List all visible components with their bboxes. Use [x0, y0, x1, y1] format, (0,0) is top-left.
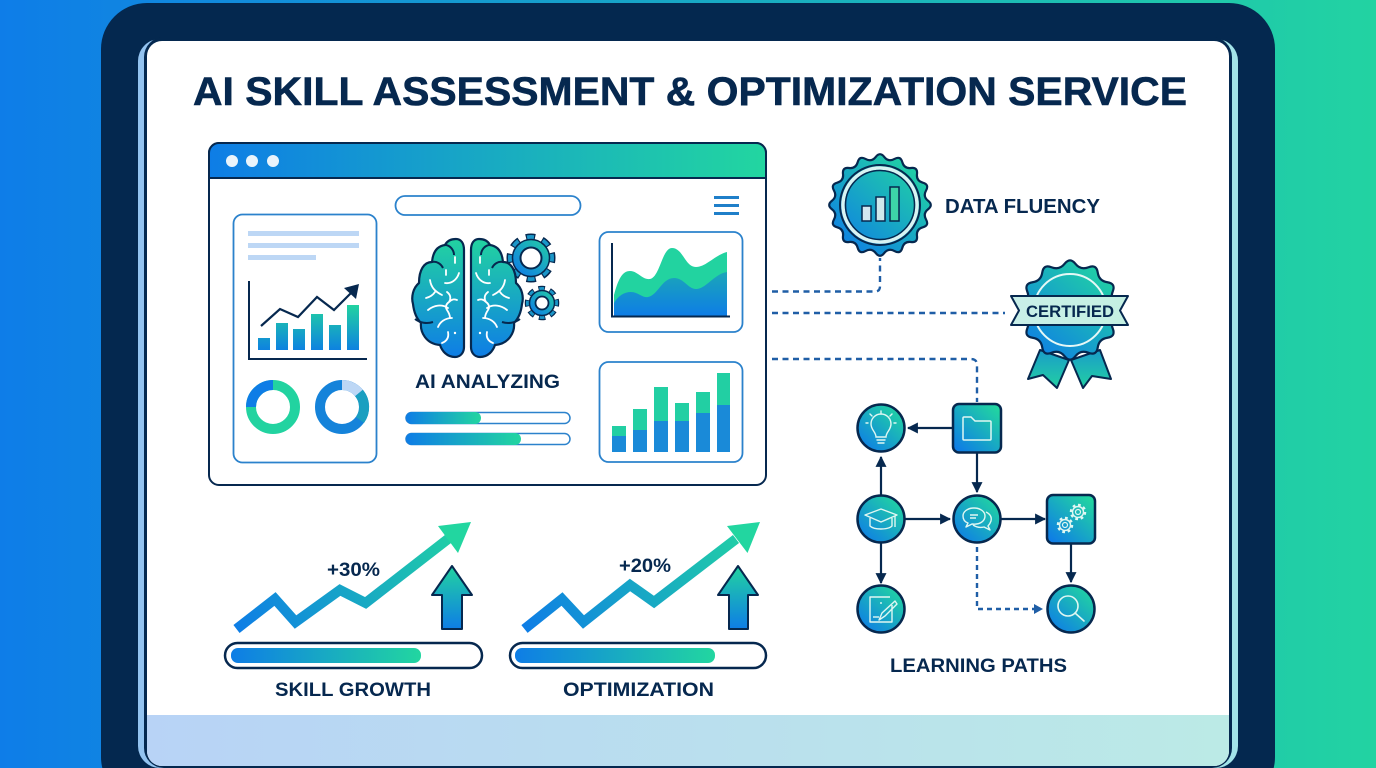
bar and trend line chart	[249, 281, 367, 359]
panel: stacked bar chart	[600, 362, 742, 462]
node: gears	[1047, 495, 1095, 544]
label: certified: CERTIFIED	[1026, 302, 1114, 321]
donut chart two	[320, 385, 364, 429]
donut chart one	[251, 385, 295, 429]
label: data fluency: DATA FLUENCY	[945, 196, 1101, 218]
panel: report sidebar	[234, 214, 376, 462]
node: magnifier	[1048, 586, 1094, 632]
progress bar one	[406, 412, 570, 424]
label: AI analyzing: AI ANALYZING	[415, 372, 560, 393]
text placeholder lines	[248, 231, 359, 260]
big gear	[510, 237, 552, 279]
badge: data fluency	[829, 154, 931, 256]
progress bar	[225, 643, 482, 668]
title: AI SKILL ASSESSMENT & OPTIMIZATION SERVICE	[193, 70, 1187, 114]
label: optimization: OPTIMIZATION	[563, 680, 714, 701]
value: +20%: +20%	[619, 556, 671, 577]
trend arrow	[236, 522, 471, 629]
icon: mini bars	[862, 187, 899, 221]
progress bar	[510, 643, 766, 668]
screen	[147, 41, 1229, 766]
dashed connectors to badges and paths	[772, 258, 1005, 402]
panel: skill growth	[225, 522, 482, 701]
panel: browser dashboard window	[209, 143, 766, 485]
window control dots	[226, 155, 279, 167]
browser header bar	[209, 143, 766, 178]
progress bar two	[406, 433, 570, 445]
badge: certified	[1011, 260, 1128, 388]
up arrow	[432, 566, 472, 629]
ribbon tails	[1028, 350, 1111, 388]
ribbon banner	[1011, 296, 1128, 325]
panel: area chart	[600, 232, 742, 332]
icon: brain with gears	[412, 237, 556, 357]
node: pencil note	[858, 586, 904, 632]
label: learning paths: LEARNING PATHS	[890, 655, 1067, 677]
trend arrow	[524, 522, 760, 629]
right brain hemisphere	[471, 239, 523, 357]
value: +30%: +30%	[327, 560, 380, 581]
search bar	[396, 196, 580, 215]
node: chat bubbles	[954, 496, 1000, 542]
node: folder	[953, 404, 1001, 452]
small gear	[528, 288, 556, 318]
up arrow	[718, 566, 758, 629]
solid arrows	[881, 428, 1071, 583]
label: skill growth: SKILL GROWTH	[275, 680, 431, 701]
panel: optimization	[510, 522, 766, 701]
icon: hamburger menu	[714, 196, 739, 215]
node: graduation cap	[858, 496, 904, 542]
dashed arrow	[977, 547, 1043, 614]
left brain hemisphere	[412, 239, 464, 357]
node: lightbulb	[858, 404, 904, 452]
diagram: learning paths	[858, 404, 1095, 677]
